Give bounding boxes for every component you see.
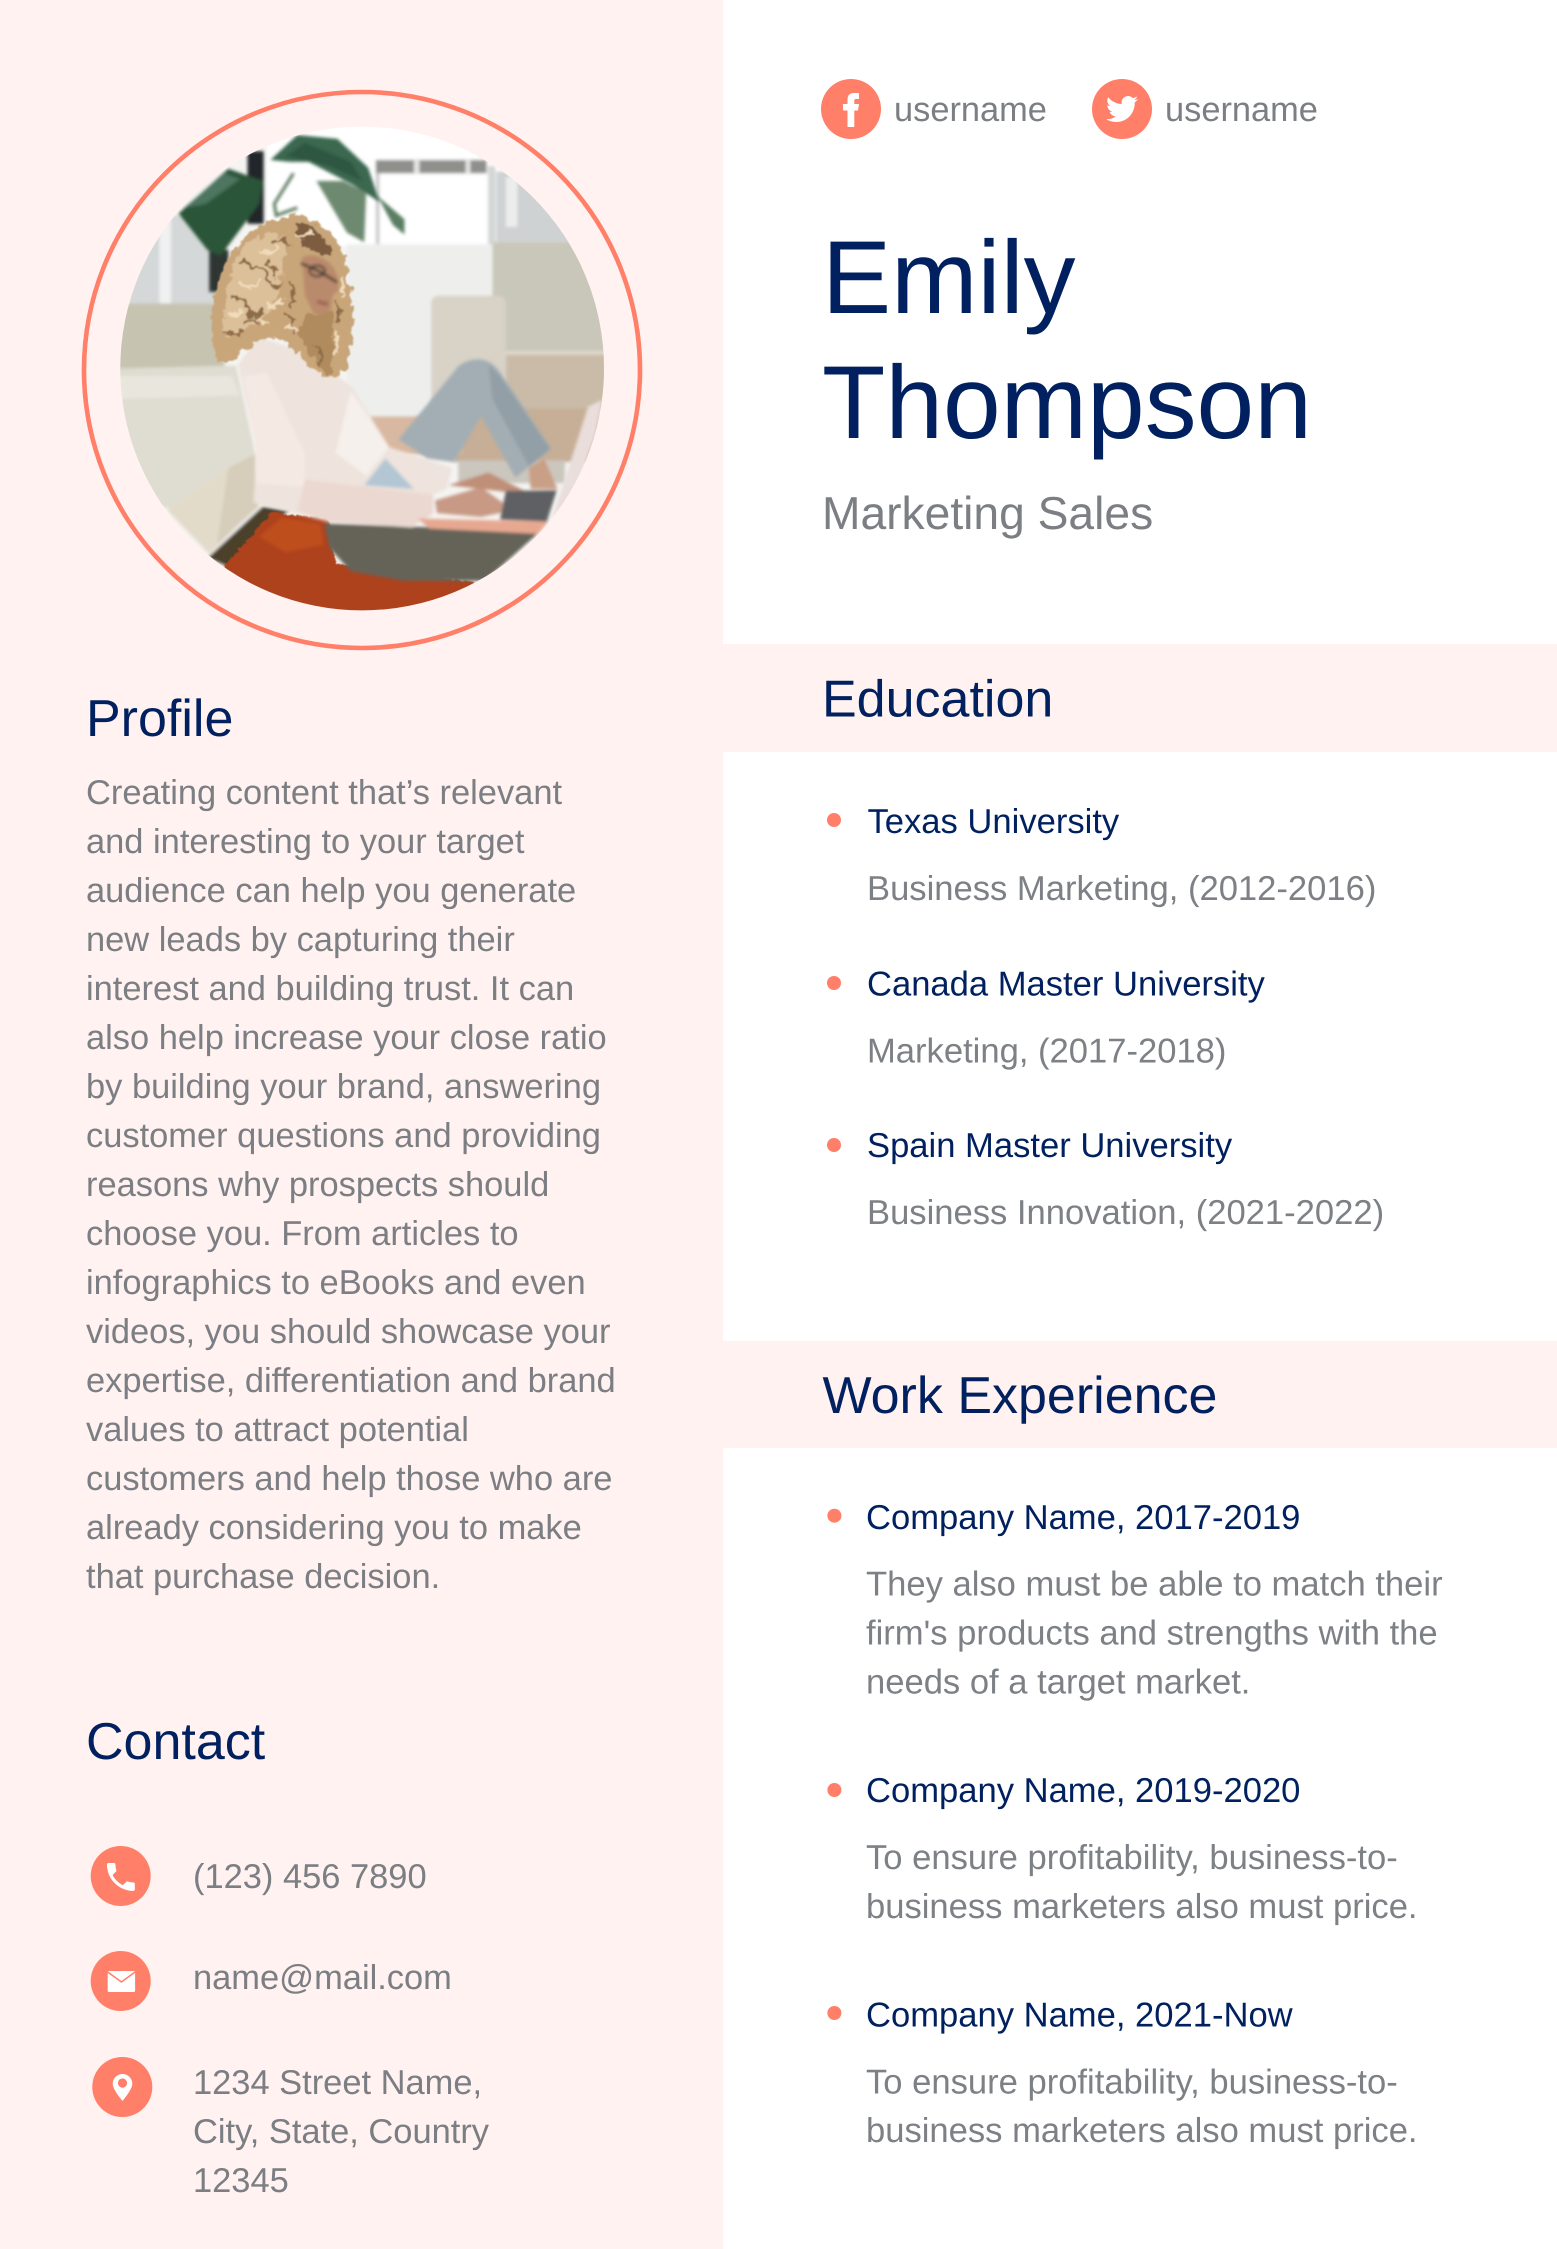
education item 2 bbox=[827, 966, 1266, 1070]
profile paragraph: new leads by capturing their bbox=[86, 921, 515, 959]
shorts and seat bbox=[324, 523, 540, 581]
education item 3 bbox=[827, 1127, 1384, 1232]
profile paragraph: expertise, differentiation and brand bbox=[86, 1362, 616, 1400]
education item 1: Business Marketing, (2012-2016) bbox=[867, 870, 1376, 908]
profile paragraph: Creating content that’s relevant bbox=[86, 774, 562, 812]
icon: facebook bbox=[821, 79, 881, 139]
education item 1 bbox=[827, 803, 1376, 908]
contact: email: name@mail.com bbox=[193, 1959, 452, 1997]
social: facebook: username bbox=[894, 91, 1047, 129]
title: name: Emily bbox=[822, 219, 1076, 335]
contact: address bbox=[92, 2057, 490, 2200]
contact: address: City, State, Country bbox=[193, 2113, 490, 2151]
profile paragraph: interest and building trust. It can bbox=[86, 970, 574, 1008]
work item 2: To ensure profitability, business-to- bbox=[866, 1839, 1398, 1877]
profile paragraph: customers and help those who are bbox=[86, 1460, 612, 1498]
profile paragraph: and interesting to your target bbox=[86, 823, 525, 861]
social: twitter bbox=[1092, 79, 1318, 139]
profile paragraph: values to attract potential bbox=[86, 1411, 469, 1449]
work item 1: Company Name, 2017-2019 bbox=[866, 1499, 1300, 1537]
panel: education bbox=[723, 644, 1557, 1232]
plant bbox=[248, 151, 264, 224]
portrait photo: woman with laptop on floor bbox=[117, 124, 611, 625]
jeans legs bbox=[399, 359, 552, 478]
work item 2: Company Name, 2019-2020 bbox=[866, 1772, 1300, 1810]
portrait ring bbox=[84, 92, 640, 648]
work experience header band: Work Experience bbox=[822, 1367, 1217, 1425]
face bbox=[302, 255, 339, 316]
icon: phone bbox=[91, 1846, 151, 1906]
work item 3: To ensure profitability, business-to- bbox=[866, 2063, 1398, 2101]
social: facebook bbox=[821, 79, 1047, 139]
contact: address: 1234 Street Name, bbox=[193, 2064, 482, 2102]
contact: address: 12345 bbox=[193, 2162, 289, 2200]
icon: envelope bbox=[91, 1951, 151, 2011]
education item 2: Canada Master University bbox=[867, 966, 1266, 1004]
profile paragraph: videos, you should showcase your bbox=[86, 1313, 611, 1351]
heading: Contact: Contact bbox=[86, 1713, 266, 1771]
foot bbox=[529, 458, 558, 489]
profile paragraph: also help increase your close ratio bbox=[86, 1019, 607, 1057]
heading: Profile: Profile bbox=[86, 690, 233, 748]
work experience header band bbox=[723, 1341, 1557, 1448]
laptop bbox=[500, 490, 557, 522]
education header band: Education bbox=[822, 670, 1053, 728]
icon: twitter bird bbox=[1092, 79, 1152, 139]
subtitle: job role: Marketing Sales bbox=[822, 487, 1153, 539]
denim waist bbox=[364, 458, 414, 489]
work item 3 bbox=[827, 1997, 1418, 2150]
curly hair bbox=[211, 215, 352, 378]
title: name: Thompson bbox=[822, 344, 1312, 460]
hands bbox=[435, 487, 513, 517]
profile paragraph: by building your brand, answering bbox=[86, 1068, 601, 1106]
education item 3: Spain Master University bbox=[867, 1127, 1233, 1165]
education item 1: Texas University bbox=[868, 803, 1120, 841]
work item 2 bbox=[827, 1772, 1418, 1926]
contact: phone: (123) 456 7890 bbox=[193, 1858, 427, 1896]
education header band bbox=[723, 644, 1557, 752]
profile paragraph: choose you. From articles to bbox=[86, 1215, 519, 1253]
rug bbox=[223, 511, 475, 610]
icon: map pin bbox=[92, 2057, 152, 2117]
contact: email bbox=[91, 1951, 452, 2011]
work item 3: business marketers also must price. bbox=[866, 2112, 1418, 2150]
social: twitter: username bbox=[1165, 91, 1318, 129]
panel: left sidebar bbox=[0, 0, 723, 2249]
profile paragraph bbox=[86, 774, 616, 1596]
profile paragraph: reasons why prospects should bbox=[86, 1166, 549, 1204]
work item 1: firm's products and strengths with the bbox=[866, 1614, 1438, 1652]
work item 1 bbox=[827, 1499, 1443, 1701]
profile paragraph: audience can help you generate bbox=[86, 872, 576, 910]
work item 1: They also must be able to match their bbox=[866, 1566, 1443, 1604]
title: name bbox=[822, 219, 1312, 460]
profile paragraph: already considering you to make bbox=[86, 1509, 582, 1547]
work item 1: needs of a target market. bbox=[866, 1663, 1250, 1701]
education item 3: Business Innovation, (2021-2022) bbox=[867, 1194, 1384, 1232]
work item 3: Company Name, 2021-Now bbox=[866, 1997, 1294, 2035]
work item 2: business marketers also must price. bbox=[866, 1888, 1418, 1926]
profile paragraph: customer questions and providing bbox=[86, 1117, 601, 1155]
shirt bbox=[238, 337, 452, 527]
education item 2: Marketing, (2017-2018) bbox=[867, 1032, 1226, 1070]
panel: work experience bbox=[723, 1341, 1557, 2150]
profile paragraph: that purchase decision. bbox=[86, 1558, 440, 1596]
contact: phone bbox=[91, 1846, 427, 1906]
profile paragraph: infographics to eBooks and even bbox=[86, 1264, 586, 1302]
